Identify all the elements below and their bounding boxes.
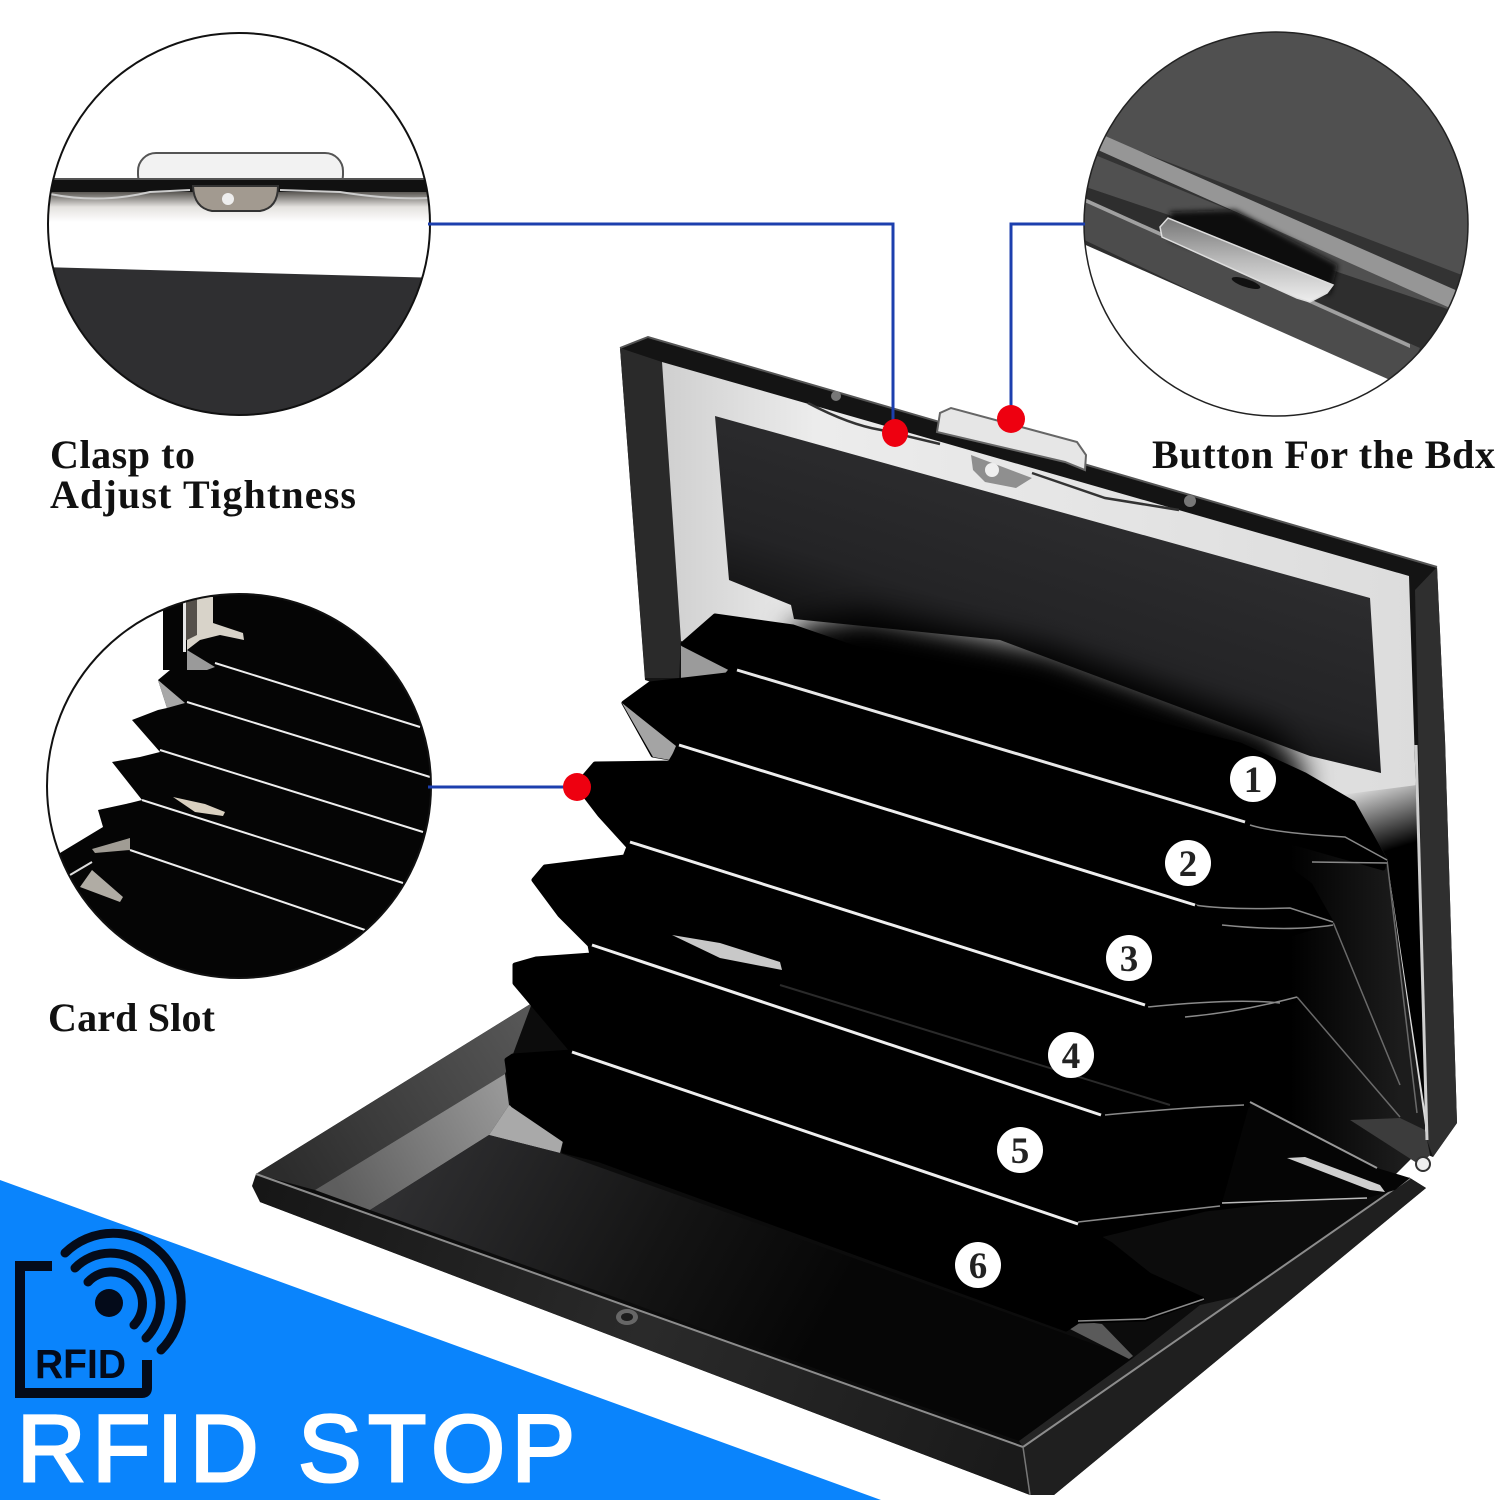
connector: clasp callout xyxy=(428,224,908,447)
clasp tab xyxy=(937,408,1086,488)
badge 2 xyxy=(1165,840,1211,886)
banner text: RFID STOP xyxy=(17,1396,575,1500)
pocket 3 xyxy=(577,745,1297,1060)
label: clasp: Clasp to xyxy=(50,432,195,477)
badge 2: 2 xyxy=(1179,844,1197,885)
pocket 4 xyxy=(534,842,1248,1130)
hinge xyxy=(1416,1157,1430,1171)
connector: card slot callout xyxy=(428,773,591,801)
label: button: Button For the Bdx xyxy=(1152,432,1495,477)
badge 3 xyxy=(1106,935,1152,981)
circle inset: clasp detail xyxy=(40,25,440,425)
circle inset: button detail xyxy=(1083,31,1469,417)
badge 1: 1 xyxy=(1244,760,1262,801)
icon: RFID card with waves: RFID xyxy=(35,1341,126,1387)
case lid xyxy=(620,337,1457,1157)
case bottom tray xyxy=(252,1003,1426,1495)
circle inset: card slot detail xyxy=(46,593,432,979)
icon: RFID card with waves xyxy=(20,1233,181,1393)
badge 6: 6 xyxy=(969,1246,987,1287)
pocket 5 xyxy=(515,945,1220,1240)
pocket 6 xyxy=(507,1052,1204,1329)
label: clasp xyxy=(50,432,356,517)
glare highlight xyxy=(672,935,782,970)
badge 3: 3 xyxy=(1120,939,1138,980)
slot number badges xyxy=(955,756,1276,1288)
badge 1 xyxy=(1230,756,1276,802)
label: card slot: Card Slot xyxy=(48,995,216,1040)
badge 4 xyxy=(1048,1032,1094,1078)
pocket 1 xyxy=(683,612,1387,868)
fanned pocket ends xyxy=(1078,745,1430,1224)
connector: button callout xyxy=(997,224,1085,433)
pocket 2 xyxy=(622,670,1333,960)
lid rivets xyxy=(831,391,1196,507)
banner: blue corner triangle xyxy=(0,1180,881,1500)
badge 5: 5 xyxy=(1011,1131,1029,1172)
badge 6 xyxy=(955,1242,1001,1288)
badge 4: 4 xyxy=(1062,1036,1080,1077)
open card case xyxy=(252,337,1457,1495)
label: clasp: Adjust Tightness xyxy=(50,472,356,517)
badge 5 xyxy=(997,1127,1043,1173)
